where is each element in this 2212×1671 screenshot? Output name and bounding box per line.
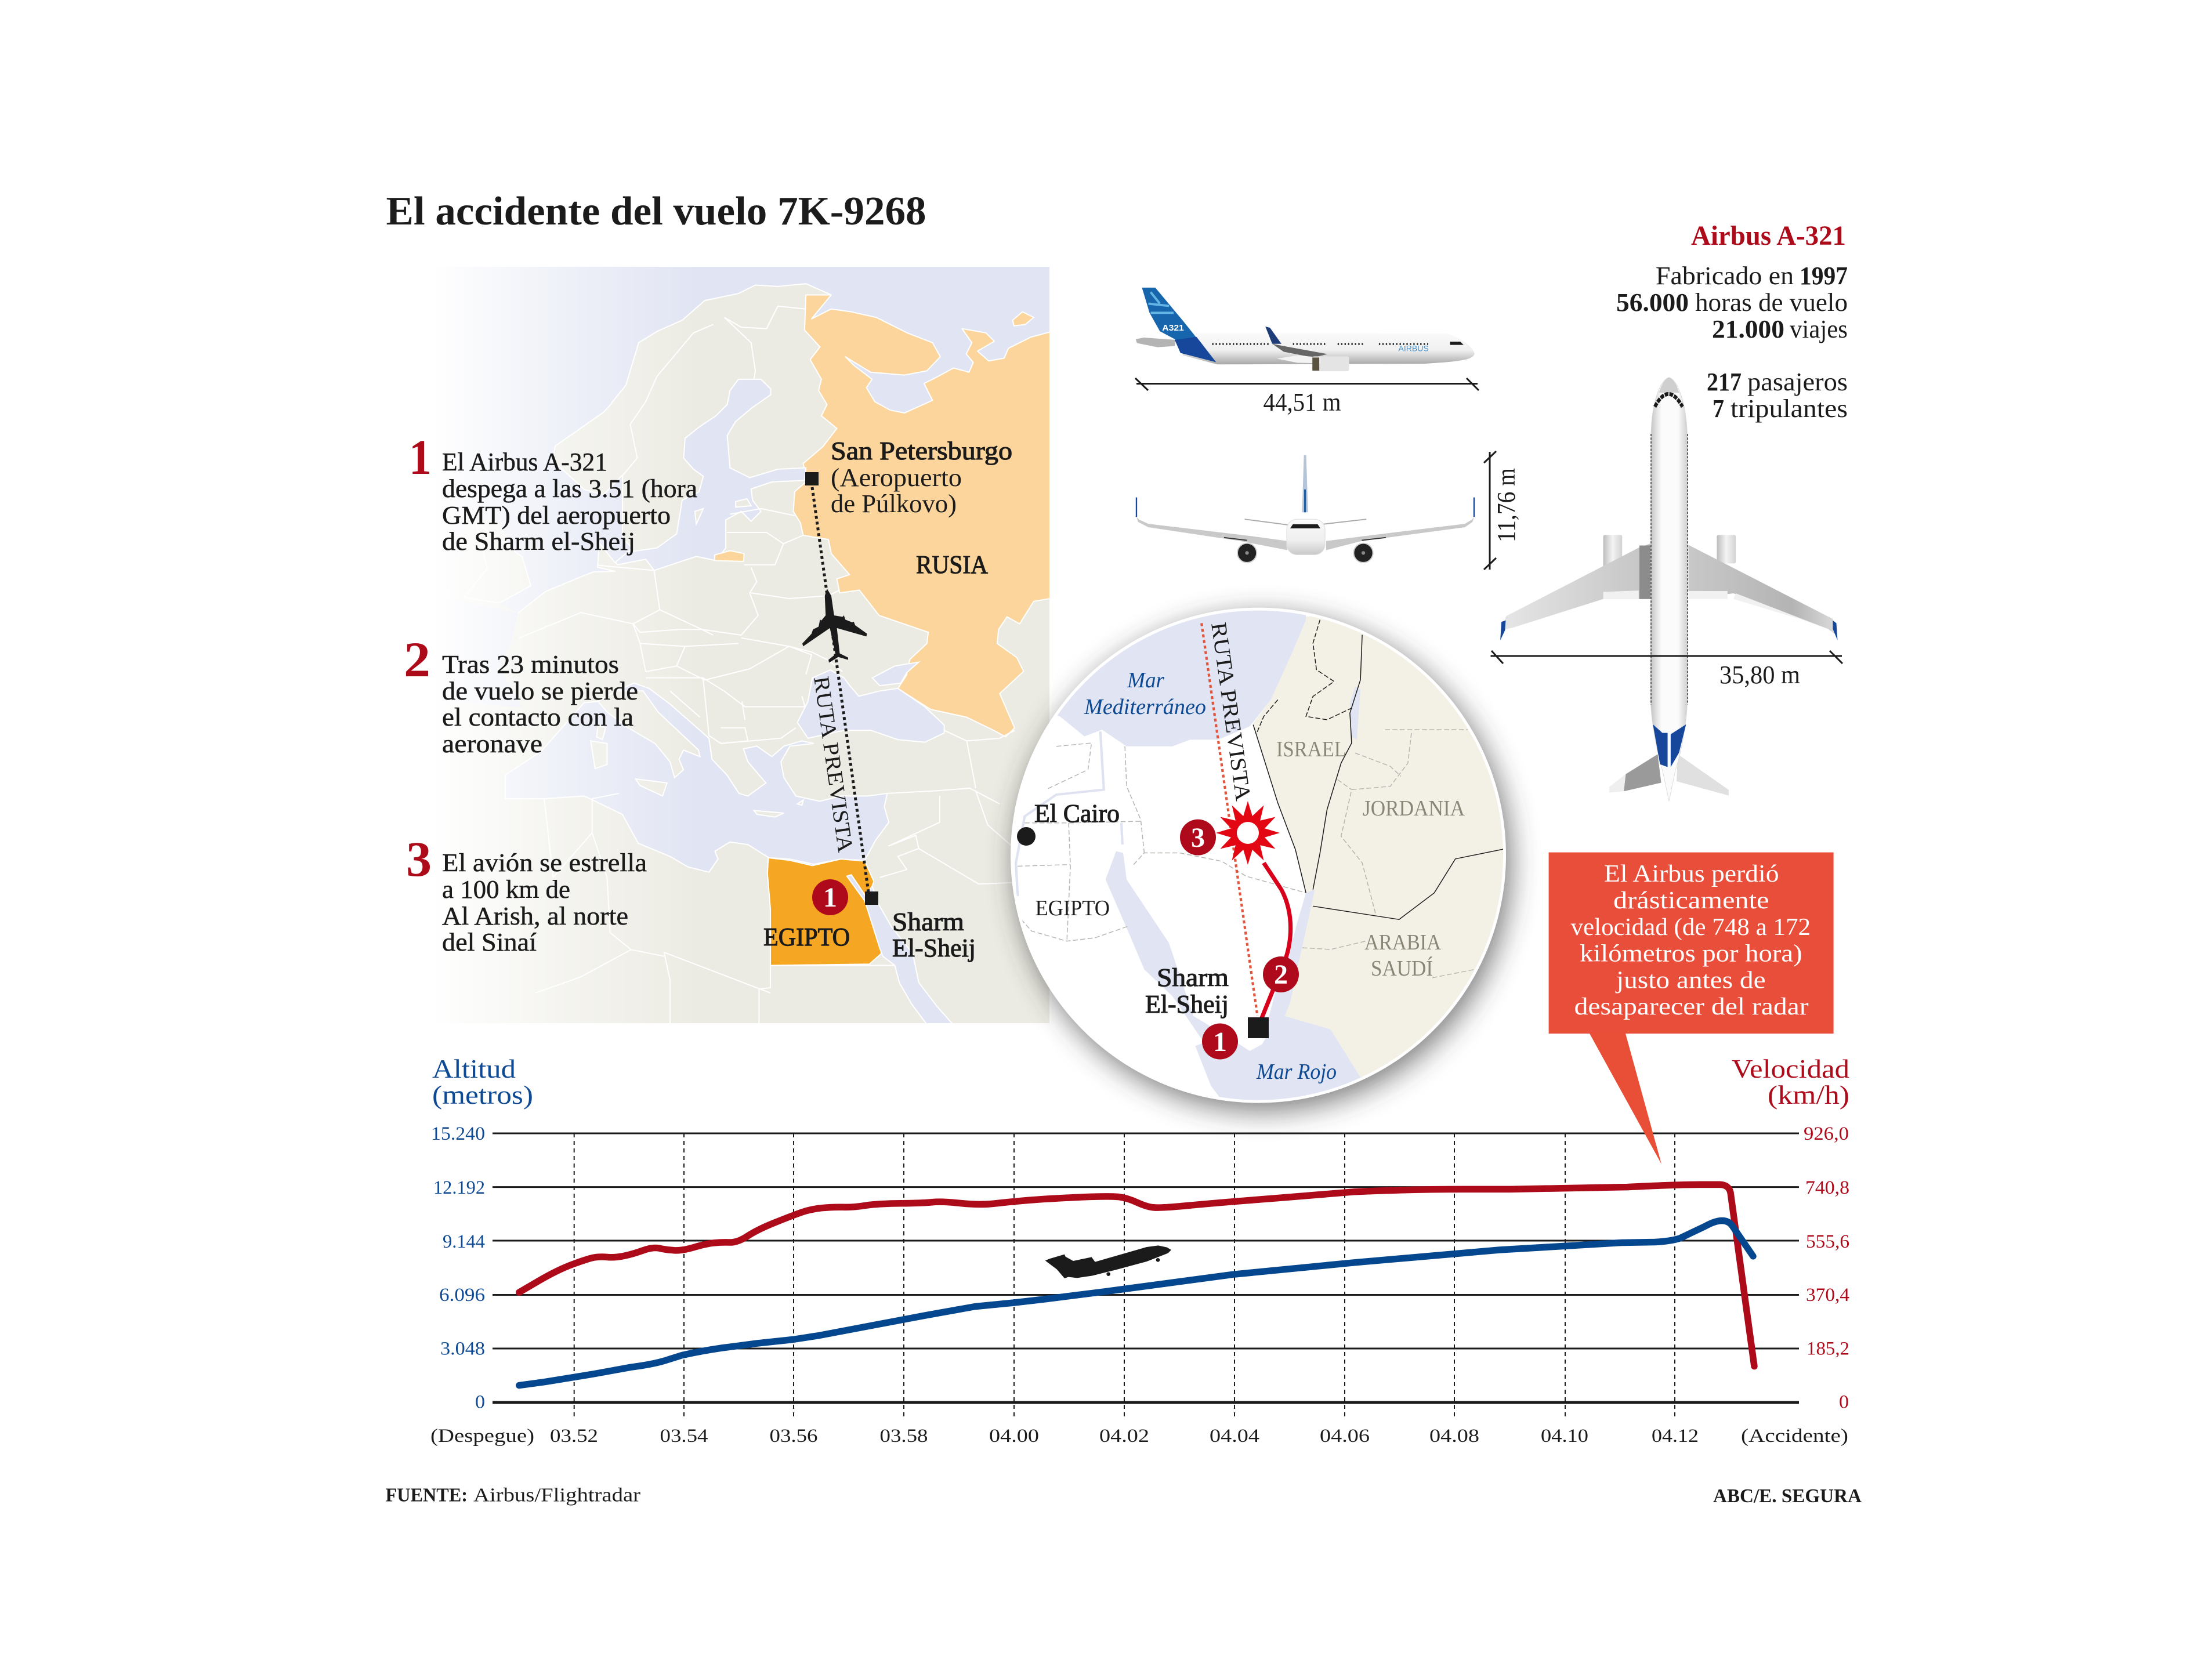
marker: Sharm El-Sheij square [1248,1017,1269,1038]
axis labels: time [430,1426,1848,1447]
axis labels: time: 04.00 [989,1426,1039,1447]
Mediterranean [505,683,889,872]
Black Sea [798,670,944,742]
text block: step 3: El avión se estrella [442,849,647,877]
panel: map of Europe and route [497,267,1049,1023]
label: Arabia Saudí: SAUDÍ [1371,956,1433,981]
axis labels: time: 04.02 [1099,1426,1149,1447]
label: Sharm El-Sheij: Sharm [892,908,964,936]
text block: step 3: Al Arish, al norte [442,902,628,930]
title: El accidente del vuelo 7K-9268 [386,189,926,234]
axis labels: altitude: 0 [475,1392,485,1413]
marker: 1 on map [812,879,848,915]
axis labels: time: 03.52 [550,1426,598,1447]
axis labels: altitude: 12.192 [433,1177,485,1198]
text block: aircraft facts: 21.000 [1712,315,1784,343]
marker: 2: 2 [1274,959,1288,990]
text block: aircraft facts: 56.000 [1616,288,1689,317]
label: Israel: ISRAEL [1276,737,1346,762]
label: Mar Mediterráneo: Mar [1127,668,1164,693]
marker: 2 [1263,956,1299,992]
text block: aircraft facts: 1997 [1800,262,1848,290]
dimension: length [1135,378,1479,416]
axis labels: speed: 185,2 [1806,1339,1849,1360]
panel: circular detail map [1004,603,1531,1111]
Red Sea [847,875,958,1030]
label: Arabia Saudí: ARABIA [1364,930,1441,955]
marker: 1 on map: 1 [823,882,837,913]
Russia [519,267,1049,738]
text block: step 2: aeronave [442,730,542,758]
axis labels: time: 04.06 [1320,1426,1370,1447]
text block: aircraft facts: 217 [1707,368,1742,396]
dimension: length: 44,51 m [1264,388,1341,416]
axis labels: time: 04.08 [1429,1426,1479,1447]
label: San Petersburgo [831,437,1012,518]
callout: speed drop: kilómetros por hora) [1580,941,1802,967]
text block: aircraft facts: viajes [1790,315,1848,343]
axis title: speed [1732,1054,1849,1110]
marker: 1 [1202,1023,1238,1059]
label: El Cairo: El Cairo [1034,799,1120,828]
series: altitude [519,1221,1753,1386]
icon: top view of plane [1500,378,1838,801]
text block: step 1: GMT) del aeropuerto [442,501,671,530]
series: speed [519,1184,1754,1366]
marker: 1: 1 [1213,1027,1227,1057]
icon: explosion [1216,801,1280,865]
source credit [385,1485,641,1506]
left fade [432,267,613,1023]
label: Sharm El-Sheij: El-Sheij [1145,990,1229,1018]
axis title: speed: Velocidad [1732,1054,1849,1083]
callout: speed drop [1549,853,1834,1164]
line chart: altitude and speed [493,1133,1799,1420]
text block: step 1: despega a las 3.51 (hora [442,474,697,503]
text block: step 1: 1 [409,429,432,485]
text block: aircraft facts: tripulantes [1730,394,1848,423]
label: Egipto: EGIPTO [1035,896,1110,920]
text block: step 3: 3 [406,831,432,887]
text block: aircraft facts: 7 [1713,394,1724,423]
label: San Petersburgo: de Púlkovo) [831,490,957,518]
text block: step 2: Tras 23 minutos [442,650,619,679]
route: planned [1201,623,1258,1016]
callout: speed drop: drásticamente [1613,887,1769,914]
axis labels: speed: 0 [1839,1392,1849,1413]
axis labels: speed: 740,8 [1805,1177,1849,1198]
label: route on map: RUTA PREVISTA [809,675,857,854]
text block: aircraft facts: Fabricado en [1656,262,1794,290]
marker: El Cairo [1017,827,1036,846]
axis labels: time: 04.12 [1652,1426,1699,1447]
axis title: altitude: Altitud [432,1054,516,1083]
icon: plane silhouette [1045,1245,1171,1278]
icon: side view of plane: A321 [1162,323,1184,333]
text block: aircraft facts [1616,262,1848,423]
text block: step 2 [404,632,638,758]
label: Arabia Saudí [1364,930,1441,981]
axis labels: time: (Despegue) [430,1426,534,1447]
Baltic [609,379,806,570]
text block: step 1 [409,429,697,556]
label: Mar Rojo: Mar Rojo [1256,1060,1337,1084]
axis labels: time: 04.04 [1210,1426,1259,1447]
axis labels: speed: 555,6 [1806,1231,1849,1252]
author credit: ABC/E. SEGURA [1713,1485,1862,1507]
axis labels: speed: 370,4 [1806,1285,1849,1306]
axis labels: time: 03.56 [769,1426,818,1447]
icon: front view of plane [1136,455,1474,563]
source credit: FUENTE: [385,1485,468,1506]
text block: step 3: del Sinaí [442,928,537,956]
axis labels: altitude: 6.096 [439,1285,485,1306]
Arctic coast [553,267,1049,412]
heading: Airbus A-321: Airbus A-321 [1691,220,1846,251]
axis title: speed: (km/h) [1768,1080,1849,1110]
label: route in detail map: RUTA PREVISTA [1206,621,1255,803]
text block: aircraft facts: horas de vuelo [1695,288,1848,317]
axis labels: altitude: 3.048 [440,1339,485,1360]
label: San Petersburgo: (Aeropuerto [831,463,962,492]
label: Sharm El-Sheij [1145,963,1229,1018]
axis labels: speed [1804,1123,1849,1413]
label: Rusia: RUSIA [916,550,988,579]
marker: 3 [1180,820,1216,856]
text block: step 3 [406,831,647,956]
axis labels: altitude [431,1123,485,1413]
axis title: altitude [432,1054,533,1110]
callout: speed drop: desaparecer del radar [1574,994,1809,1020]
North Sea and Atlantic [553,403,630,587]
marker: 3: 3 [1191,822,1205,853]
icon: plane on route [802,589,867,662]
axis title: altitude: (metros) [432,1080,533,1110]
label: Mar Mediterráneo [1084,668,1206,719]
text block: step 2: 2 [404,632,430,687]
callout: speed drop: justo antes de [1615,967,1766,994]
dimension: wingspan [1491,651,1842,689]
text block: step 1: El Airbus A-321 [442,448,607,476]
dimension: height: 11,76 m [1492,468,1520,542]
route: actual [1258,863,1291,1026]
axis labels: altitude: 9.144 [443,1231,485,1252]
label: Egipto: EGIPTO [763,923,850,951]
text block: step 3: a 100 km de [442,875,570,904]
text block: aircraft facts: pasajeros [1747,368,1848,396]
text block: step 2: el contacto con la [442,703,633,731]
icon: side view of plane [1136,288,1475,371]
Egypt [767,858,881,965]
label: Sharm El-Sheij: El-Sheij [892,934,976,962]
axis labels: time: (Accidente) [1741,1426,1848,1447]
route line on map [805,472,878,905]
text block: step 2: de vuelo se pierde [442,677,638,705]
dimension: height [1484,451,1520,570]
callout: speed drop: El Airbus perdió [1604,861,1779,887]
axis labels: altitude: 15.240 [431,1123,485,1144]
axis labels: time: 03.54 [660,1426,708,1447]
axis labels: time: 03.58 [879,1426,928,1447]
axis labels: time: 04.10 [1541,1426,1588,1447]
label: Mar Mediterráneo: Mediterráneo [1084,695,1206,719]
callout: speed drop: velocidad (de 748 a 172 [1571,914,1811,941]
axis labels: speed: 926,0 [1804,1123,1849,1144]
dimension: wingspan: 35,80 m [1719,661,1800,689]
label: Jordania: JORDANIA [1363,796,1465,821]
label: Sharm El-Sheij [892,908,976,962]
text block: step 1: de Sharm el-Sheij [442,527,635,556]
icon: side view of plane: AIRBUS [1399,344,1429,353]
label: San Petersburgo: San Petersburgo [831,437,1012,465]
source credit: Airbus/Flightradar [473,1485,641,1506]
label: Sharm El-Sheij: Sharm [1157,963,1229,992]
